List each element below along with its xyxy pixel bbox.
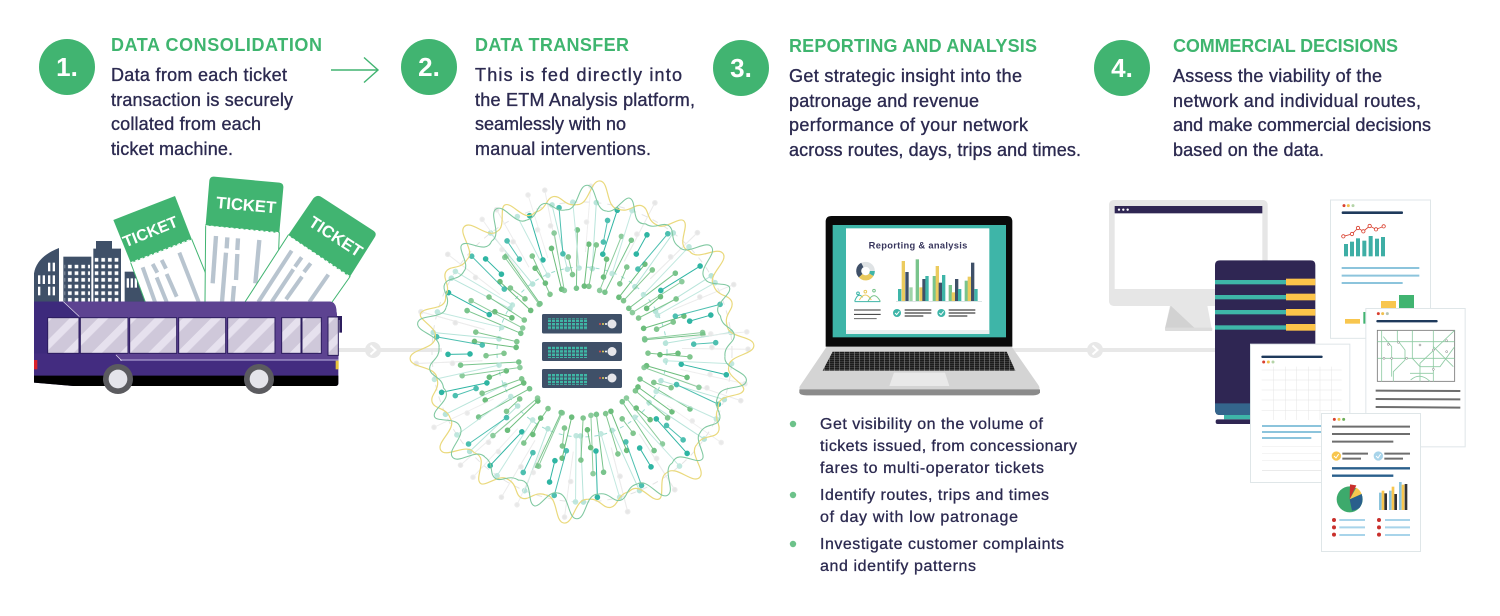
step 1: data consolidation bbox=[39, 35, 322, 159]
ticket right bbox=[245, 196, 376, 303]
report document: pie and bars summary bbox=[1321, 413, 1420, 551]
bullet 2: of day with low patronage bbox=[820, 509, 1018, 526]
people icons bbox=[855, 289, 880, 302]
server stack bbox=[542, 314, 622, 388]
step 2 description bbox=[475, 65, 695, 159]
city skyline bbox=[34, 241, 145, 302]
step 4: commercial decisions bbox=[1094, 36, 1431, 160]
step 2 heading: DATA TRANSFER bbox=[475, 35, 629, 55]
step 4 number badge bbox=[1094, 40, 1150, 96]
laptop base and keyboard bbox=[799, 347, 1040, 395]
arrow between step 1 and step 2 bbox=[331, 58, 378, 82]
bullet 1: fares to multi-operator tickets bbox=[820, 460, 1044, 477]
step 3 description: Get strategic insight into the bbox=[789, 66, 1022, 86]
bullet 1: tickets issued, from concessionary bbox=[820, 438, 1077, 455]
step 1 number badge: 1. bbox=[56, 52, 78, 82]
server tower bbox=[1215, 260, 1315, 424]
step 4 description: Assess the viability of the bbox=[1173, 66, 1382, 86]
step 4 description bbox=[1173, 66, 1431, 160]
check items bbox=[893, 309, 975, 317]
illustration: computer, server tower and report documents bbox=[1109, 200, 1465, 551]
step 2 description: the ETM Analysis platform, bbox=[475, 90, 695, 110]
step 2: data transfer bbox=[401, 35, 695, 159]
ticket centre: TICKET bbox=[215, 193, 277, 217]
step 2 description: This is fed directly into bbox=[475, 65, 682, 85]
step 4 number badge: 4. bbox=[1111, 53, 1133, 83]
step 1 description: Data from each ticket bbox=[111, 65, 287, 85]
step 3 description: performance of your network bbox=[789, 115, 1029, 135]
step 4 heading: COMMERCIAL DECISIONS bbox=[1173, 36, 1398, 56]
step 4 description: and make commercial decisions bbox=[1173, 115, 1431, 135]
report document: line and bar charts bbox=[1330, 200, 1430, 338]
ticket left bbox=[113, 196, 217, 302]
laptop screen bbox=[826, 216, 1012, 347]
step 1 description: ticket machine. bbox=[111, 139, 233, 159]
dashboard title: Reporting & analysis bbox=[869, 240, 967, 250]
bullet 1: Get visibility on the volume of bbox=[820, 416, 1044, 433]
step 2 description: seamlessly with no bbox=[475, 114, 626, 134]
ticket right: TICKET bbox=[305, 212, 366, 261]
step 2 number badge: 2. bbox=[418, 52, 440, 82]
step 1 number badge bbox=[39, 39, 95, 95]
step 4 description: network and individual routes, bbox=[1173, 91, 1421, 111]
step 3 description: across routes, days, trips and times. bbox=[789, 140, 1081, 160]
step 3: reporting and analysis bbox=[713, 36, 1081, 160]
step 1 heading: DATA CONSOLIDATION bbox=[111, 35, 322, 55]
bullet 1 bbox=[790, 416, 1077, 477]
bullet list: reporting benefits bbox=[790, 416, 1077, 575]
connector: laptop to computer bbox=[1012, 342, 1216, 358]
bullet 2: Identify routes, trips and times bbox=[820, 487, 1049, 504]
bus wheels bbox=[103, 364, 274, 394]
bar chart bbox=[896, 259, 982, 301]
illustration: laptop with reporting dashboard bbox=[799, 216, 1040, 395]
desktop monitor bbox=[1109, 200, 1268, 331]
bullet 3: and identify patterns bbox=[820, 558, 976, 575]
step 3 heading: REPORTING AND ANALYSIS bbox=[789, 36, 1037, 56]
left text lines bbox=[854, 310, 881, 319]
ticket left: TICKET bbox=[121, 214, 181, 251]
network spokes and waves bbox=[365, 132, 802, 575]
bullet 3: Investigate customer complaints bbox=[820, 536, 1064, 553]
bullet 3 bbox=[790, 536, 1064, 575]
step 4 description: based on the data. bbox=[1173, 140, 1324, 160]
step 2 description: manual interventions. bbox=[475, 139, 651, 159]
white centre behind servers bbox=[524, 294, 640, 410]
step 1 description bbox=[111, 65, 293, 159]
bus windows bbox=[48, 317, 338, 355]
ticket centre bbox=[205, 177, 283, 302]
step 3 description bbox=[789, 66, 1081, 160]
step 2 number badge bbox=[401, 39, 457, 95]
step 3 number badge bbox=[713, 40, 769, 96]
bus body bbox=[34, 302, 342, 386]
illustration: bus with tickets and city skyline bbox=[34, 177, 376, 394]
step 3 description: patronage and revenue bbox=[789, 91, 979, 111]
step 1 description: collated from each bbox=[111, 114, 261, 134]
step 1 description: transaction is securely bbox=[111, 90, 293, 110]
donut chart bbox=[859, 264, 872, 278]
report document: route map bbox=[1366, 308, 1465, 447]
illustration: radial data network around servers bbox=[365, 132, 802, 575]
bullet 2 bbox=[790, 487, 1049, 526]
report document: calendar grid bbox=[1250, 344, 1350, 482]
step 3 number badge: 3. bbox=[730, 53, 752, 83]
connector: bus to data hub bbox=[338, 342, 442, 358]
